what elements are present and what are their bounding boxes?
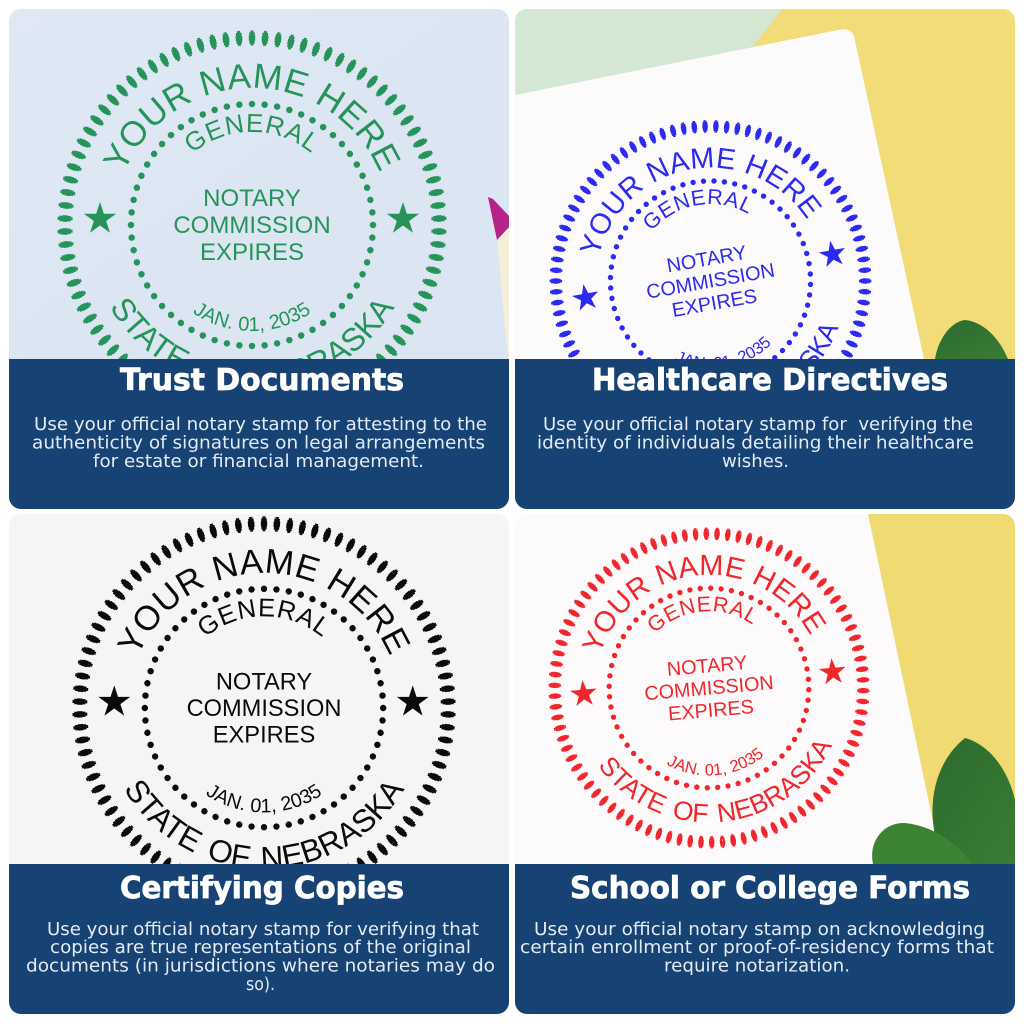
description: Use your official notary stamp for verifying that (47, 920, 479, 940)
green notary stamp: YOUR NAME HERE (102, 64, 401, 172)
heading: School or College Forms (570, 871, 970, 906)
green notary stamp: EXPIRES (200, 239, 304, 266)
photo: stamp on white sheet over yellow with leaves (548, 514, 1015, 864)
description: Use your official notary stamp for attesting to the (34, 415, 487, 435)
description: certain enrollment or proof-of-residency forms that (520, 938, 994, 958)
green notary stamp: GENERAL (186, 114, 314, 153)
red notary stamp: STATE OF NEBRASKA (600, 742, 832, 822)
red notary stamp: EXPIRES (667, 696, 755, 725)
blue notary stamp: JAN. 01, 2035 (676, 336, 770, 359)
photo: stamp on white sheet over mint and yellow (515, 9, 1015, 359)
black notary stamp: GENERAL (199, 598, 325, 637)
description: require notarization. (664, 956, 850, 976)
green notary stamp: NOTARY (203, 185, 301, 212)
black notary stamp: YOUR NAME HERE (116, 549, 410, 655)
red notary stamp: NOTARY (666, 652, 748, 681)
description: documents (in jurisdictions where notaries may do (26, 956, 495, 976)
caption band (515, 864, 1015, 1014)
icon: small leaf (872, 823, 972, 864)
photo: stamp on white paper (9, 514, 509, 864)
green notary stamp: COMMISSION (173, 212, 331, 239)
panel: trust documents (9, 9, 509, 509)
panel: certifying copies (9, 514, 509, 1014)
black notary stamp: STATE OF NEBRASKA (126, 780, 405, 864)
panel: healthcare directives (515, 9, 1015, 509)
description (520, 920, 994, 976)
icon: pencil (488, 197, 510, 359)
heading: Healthcare Directives (592, 363, 948, 398)
icon: leaf (935, 320, 1008, 359)
description: so). (246, 975, 275, 995)
description (537, 415, 974, 472)
black notary stamp (72, 516, 456, 864)
description: for estate or financial management. (93, 452, 424, 472)
red notary stamp: JAN. 01, 2035 (667, 748, 762, 776)
blue notary stamp: YOUR NAME HERE (580, 147, 822, 250)
blue notary stamp: EXPIRES (670, 285, 759, 322)
blue notary stamp: STATE OF NEBRASKA (800, 326, 839, 359)
description: Use your official notary stamp for verifying the (543, 415, 973, 435)
black notary stamp: NOTARY (216, 669, 312, 695)
description: wishes. (722, 452, 789, 472)
description: Use your official notary stamp on acknowledging (534, 920, 985, 940)
blue notary stamp: NOTARY (665, 242, 748, 277)
description: identity of individuals detailing their healthcare (537, 434, 974, 454)
blue notary stamp: COMMISSION (645, 259, 777, 304)
blue notary stamp (550, 120, 872, 359)
black notary stamp: EXPIRES (213, 722, 315, 748)
caption band (9, 864, 509, 1014)
description (32, 415, 487, 472)
description: copies are true representations of the original (50, 938, 471, 958)
heading: Certifying Copies (120, 871, 404, 906)
description: authenticity of signatures on legal arrangements (32, 434, 485, 454)
green notary stamp: JAN. 01, 2035 (194, 302, 310, 334)
photo: stamp on light blue paper with pencil (9, 9, 509, 359)
green notary stamp: STATE OF NEBRASKA (112, 298, 395, 359)
red notary stamp: YOUR NAME HERE (582, 554, 826, 647)
green notary stamp (58, 30, 446, 359)
icon: large leaf (932, 738, 1015, 864)
caption band (9, 359, 509, 509)
caption band (515, 359, 1015, 509)
heading: Trust Documents (120, 363, 404, 398)
panel: school or college forms (515, 514, 1015, 1014)
description (26, 920, 495, 995)
black notary stamp: JAN. 01, 2035 (206, 784, 321, 814)
black notary stamp: COMMISSION (187, 696, 341, 722)
red notary stamp (548, 528, 870, 848)
red notary stamp: GENERAL (648, 596, 753, 630)
red notary stamp: COMMISSION (643, 672, 775, 705)
blue notary stamp: GENERAL (644, 189, 749, 228)
